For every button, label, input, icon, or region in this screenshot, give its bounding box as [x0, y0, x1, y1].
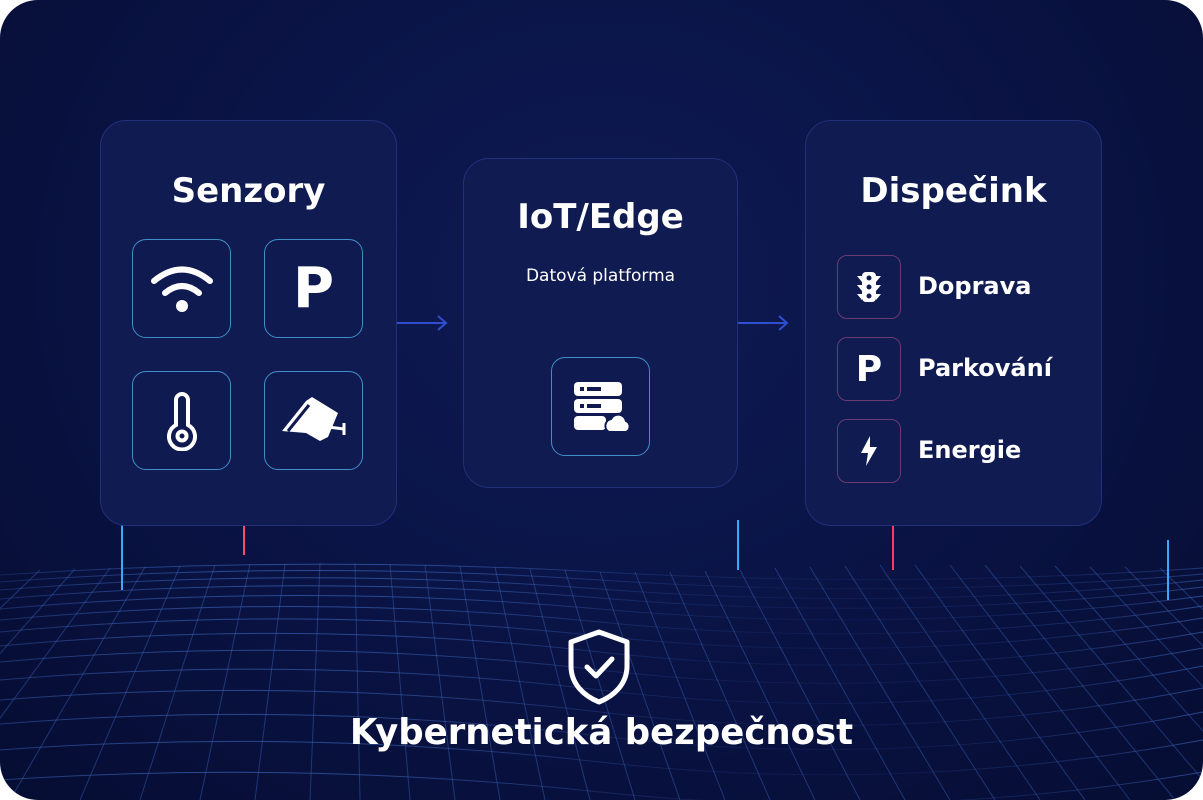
heading: Senzory: Senzory	[172, 171, 325, 211]
icon: parking	[264, 239, 363, 338]
icon: shield	[568, 630, 630, 704]
icon: traffic light	[837, 255, 901, 319]
panel: IoT/Edge	[463, 158, 738, 488]
arrow: iot to dispatch	[738, 315, 788, 331]
icon: parking: P	[856, 348, 882, 390]
panel: Senzory	[100, 120, 397, 526]
icon: wifi	[132, 239, 231, 338]
icon: thermometer	[132, 371, 231, 470]
item: Parkování	[837, 337, 1053, 401]
icon: parking: P	[293, 256, 334, 321]
heading: IoT/Edge: IoT/Edge	[517, 197, 684, 237]
item: Parkování: Parkování	[918, 354, 1052, 382]
item: Doprava: Doprava	[918, 272, 1031, 300]
subtitle: Datová platforma	[526, 266, 675, 286]
icon: camera	[264, 371, 363, 470]
panel: Dispečink	[805, 120, 1102, 526]
item: Doprava	[837, 255, 1031, 319]
item: Energie: Energie	[918, 436, 1021, 464]
icon: lightning	[837, 419, 901, 483]
arrow: sensors to iot	[397, 315, 448, 331]
item: Energie	[837, 419, 1021, 483]
icon: parking	[837, 337, 901, 401]
heading: Dispečink: Dispečink	[860, 171, 1047, 211]
icon: server cloud	[551, 357, 650, 456]
title: Kybernetická bezpečnost: Kybernetická bezpečnost	[350, 712, 853, 753]
